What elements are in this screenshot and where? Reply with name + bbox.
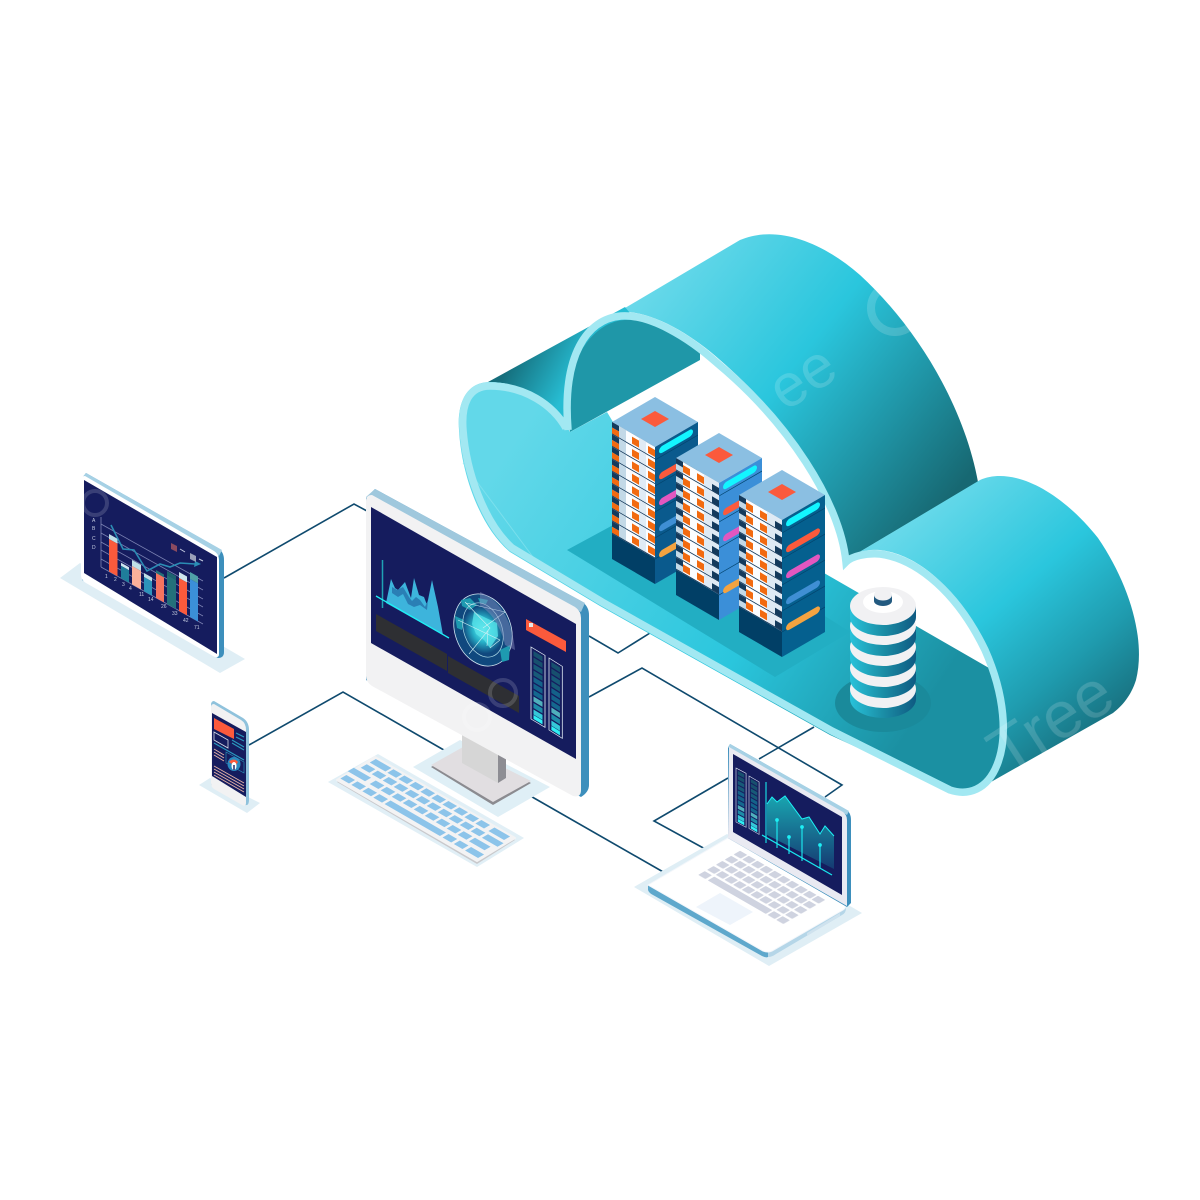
tablet axis labels: 11 <box>139 592 144 598</box>
screen red label <box>526 619 566 652</box>
screen level rack one <box>531 647 545 727</box>
monitor top edge <box>366 489 585 612</box>
server B front <box>676 458 719 620</box>
laptop screen <box>733 754 842 895</box>
tablet axis labels: 3 <box>122 582 125 588</box>
phone red block <box>214 718 234 739</box>
keyboard shadow <box>328 754 524 867</box>
connection lines <box>224 504 842 873</box>
server C front <box>739 495 782 657</box>
screen dark bar two <box>448 656 519 713</box>
laptop keyboard <box>696 850 827 925</box>
battery shadow <box>835 674 931 732</box>
server A side <box>655 422 698 584</box>
phone <box>199 701 260 813</box>
watermarks: ee <box>756 330 848 423</box>
tablet shadow <box>60 563 245 673</box>
cloud inner arch <box>567 320 700 432</box>
stand base <box>431 747 531 805</box>
stand neck <box>462 735 506 783</box>
server B top <box>676 433 762 483</box>
laptop trackpad <box>696 893 753 925</box>
phone shadow <box>199 778 260 813</box>
laptop area chart <box>762 782 834 875</box>
screen level rack two <box>549 658 562 738</box>
server C top <box>739 470 825 520</box>
tablet axis labels: B <box>92 526 96 532</box>
keyboard keys <box>338 757 513 858</box>
tablet body side <box>82 473 224 658</box>
keyboard body <box>337 757 515 861</box>
server platform shadow <box>567 505 850 677</box>
monitor back edge <box>366 489 589 797</box>
laptop lid top edge <box>728 744 849 815</box>
monitor screen <box>371 507 576 759</box>
cloud floor <box>459 382 1004 792</box>
cloud right lobe outer surface <box>846 476 1139 795</box>
tablet axis labels: 4 <box>129 586 132 592</box>
phone screen <box>212 713 246 797</box>
laptop base left edge <box>648 885 768 957</box>
tablet bar chart <box>101 517 203 624</box>
laptop lid back <box>728 744 851 907</box>
tablet top edge <box>82 473 222 556</box>
server A top <box>612 397 698 447</box>
phone content <box>214 732 244 792</box>
laptop level rack two <box>749 776 759 834</box>
tablet bezel <box>81 476 219 657</box>
tablet axis labels: 26 <box>161 604 167 610</box>
cloud <box>459 234 1139 795</box>
screen dark bar one <box>376 614 447 671</box>
desktop monitor stand <box>413 735 550 817</box>
laptop shadow <box>634 834 862 966</box>
watermarks <box>83 284 1126 789</box>
server rack B <box>676 433 762 620</box>
laptop <box>634 744 862 966</box>
tablet axis labels: 1 <box>105 574 108 580</box>
tablet axis labels: 71 <box>194 625 200 631</box>
server C side <box>782 495 825 657</box>
tablet <box>60 473 245 673</box>
screen globe <box>444 586 522 674</box>
laptop lid bezel <box>728 747 847 906</box>
cloud big lobe outer surface <box>620 234 978 560</box>
server rack C <box>739 470 825 657</box>
laptop front groove <box>807 913 840 936</box>
server A front <box>612 422 655 584</box>
tablet axis labels: A <box>92 518 96 524</box>
laptop level rack one <box>736 768 746 827</box>
stand shadow <box>413 740 550 817</box>
laptop base top <box>648 838 845 952</box>
database cylinder <box>850 587 916 718</box>
tablet axis labels: D <box>92 545 96 551</box>
desktop keyboard <box>328 754 524 867</box>
screen area chart <box>376 560 449 638</box>
tablet screen <box>84 480 217 654</box>
phone bezel <box>211 704 246 806</box>
tablet axis labels: 2 <box>114 577 117 583</box>
cloud floor highlight <box>463 463 533 557</box>
cloud left lobe outer surface <box>488 307 640 432</box>
server B side <box>719 458 762 620</box>
server rack A <box>612 397 698 584</box>
tablet axis labels: C <box>92 536 96 542</box>
phone body side <box>211 701 249 805</box>
desktop monitor <box>366 489 589 797</box>
tablet axis labels: 42 <box>183 618 189 624</box>
tablet legend <box>171 543 203 562</box>
watermarks: Tree <box>974 654 1126 789</box>
tablet axis labels: 33 <box>172 611 178 617</box>
laptop base right edge <box>768 908 846 957</box>
keyboard edge <box>337 759 515 864</box>
tablet axis labels <box>92 518 200 631</box>
monitor bezel <box>366 495 581 796</box>
cloud front rim <box>463 316 1003 792</box>
tablet axis labels: 14 <box>148 597 154 603</box>
